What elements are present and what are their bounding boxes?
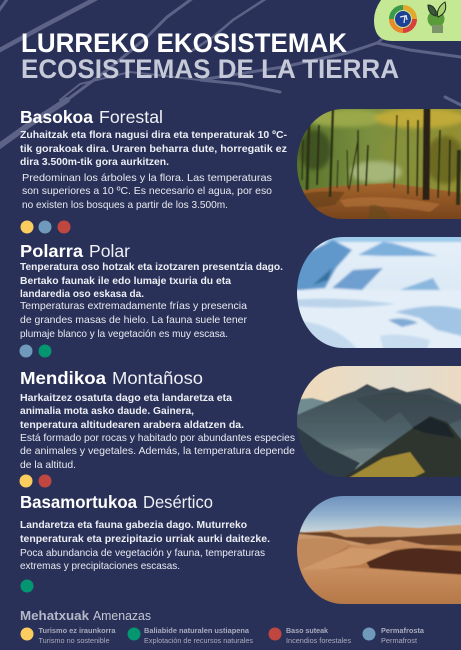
legend heading: Amenazas [93, 609, 151, 623]
text: forest Basque: tik gorakoak dira. Uraren beharra dute, horregatik ez [20, 144, 287, 155]
section: polar [20, 230, 461, 358]
heading: polar: Polarra [20, 241, 83, 261]
legend item: forest fires: Incendios forestales [286, 638, 352, 645]
text: forest Basque: dira 3.500m-tik gora aurkitzen. [20, 157, 169, 168]
section: forest [20, 102, 461, 234]
text: polar Spanish: plumaje blanco y la vegetación es muy escasa. [20, 329, 228, 340]
text: desert Basque [20, 520, 270, 545]
text: forest Spanish: son superiores a 10 ºC. Es necesario el agua, por eso [22, 186, 272, 197]
text: forest Spanish: no existen los bosques a partir de los 3.500m. [22, 200, 228, 211]
text: polar Spanish: de grandes masas de hielo. La fauna suele tener [20, 315, 248, 326]
title: Basque: LURREKO EKOSISTEMAK [21, 28, 347, 58]
legend: threats [20, 609, 424, 645]
icon: leaf logo [428, 2, 446, 33]
legend item: forest fires: Baso suteak [286, 628, 328, 635]
text: mountain Basque [20, 393, 244, 431]
heading: polar: Polar [89, 241, 130, 261]
heading: mountain [20, 368, 203, 388]
threat dots: forest [20, 220, 70, 234]
text: desert Spanish [20, 548, 265, 572]
section: mountain [20, 360, 461, 488]
heading: desert: Desértico [143, 492, 213, 512]
threat dots: polar [20, 344, 52, 358]
text: mountain Basque: Harkaitzez osatuta dago eta landaretza eta [20, 393, 232, 404]
legend item: resource exploitation: Explotación de recursos naturales [144, 638, 254, 645]
icon: SDG wheel [392, 8, 415, 30]
legend item: permafrost [362, 628, 424, 645]
photo: mountain [297, 366, 461, 477]
text: desert Basque: Landaretza eta fauna gabezia dago. Muturreko [20, 520, 247, 531]
legend item: resource exploitation [128, 628, 254, 645]
background branches [0, 0, 461, 147]
logo panel [374, 0, 461, 41]
text: forest Spanish [22, 173, 272, 211]
text: desert Spanish: Poca abundancia de vegetación y fauna, temperaturas [20, 548, 265, 559]
heading: forest: Forestal [99, 107, 163, 127]
text: forest Spanish: Predominan los árboles y la flora. Las temperaturas [22, 173, 272, 184]
text: mountain Spanish: de animales y vegetales. Además, la temperatura depende [20, 446, 295, 457]
legend heading: Mehatxuak [20, 609, 89, 623]
text: mountain Spanish: de la altitud. [20, 460, 76, 471]
photo: polar [297, 237, 461, 348]
text: mountain Basque: tenperatura altitudearen arabera aldatzen da. [20, 420, 244, 431]
text: polar Basque [20, 262, 283, 300]
text: mountain Spanish: Está formado por rocas y habitado por abundantes especies [20, 433, 295, 444]
heading: polar [20, 241, 130, 261]
legend item: unsustainable tourism: Turismo no sostenible [38, 638, 110, 645]
text: polar Basque: Tenperatura oso hotzak eta izotzaren presentzia dago. [20, 262, 283, 273]
photo: desert [297, 496, 461, 604]
heading: desert: Basamortukoa [20, 492, 137, 512]
text: mountain Basque: animalia mota asko daude. Gainera, [20, 406, 194, 417]
text: polar Spanish [20, 301, 248, 340]
text: polar Spanish: Temperaturas extremadamente frías y presencia [20, 301, 247, 312]
section: desert [20, 490, 461, 610]
legend item: permafrost: Permafrost [381, 638, 417, 645]
legend item: permafrost: Permafrosta [381, 628, 424, 635]
legend item: unsustainable tourism: Turismo ez iraunkorra [38, 628, 116, 635]
heading: desert [20, 492, 213, 512]
legend item: unsustainable tourism [20, 628, 116, 645]
legend heading [20, 609, 151, 623]
photo: forest [297, 109, 461, 219]
text: desert Basque: tenperaturak eta prezipitazio urriak aurki daitezke. [20, 534, 270, 545]
legend item: forest fires [268, 628, 352, 645]
text: forest Basque: Zuhaitzak eta flora nagusi dira eta tenperaturak 10 ºC- [20, 130, 287, 141]
threat dots: mountain [20, 474, 52, 488]
text: polar Basque: landaredia oso eskasa da. [20, 289, 144, 300]
heading: forest: Basokoa [20, 107, 93, 127]
heading: forest [20, 107, 163, 127]
heading: mountain: Montañoso [112, 368, 203, 388]
legend item: resource exploitation: Baliabide naturalen ustiapena [144, 628, 249, 635]
text: mountain Spanish [20, 433, 295, 471]
text: polar Basque: Bertako faunak ile edo lumaje txuria du eta [20, 276, 231, 287]
title: Spanish: ECOSISTEMAS DE LA TIERRA [21, 54, 399, 84]
text: desert Spanish: extremas y precipitaciones escasas. [20, 561, 180, 572]
threat dot: desert [20, 580, 34, 592]
text: forest Basque [20, 130, 287, 168]
title [21, 28, 399, 84]
heading: mountain: Mendikoa [20, 368, 106, 388]
